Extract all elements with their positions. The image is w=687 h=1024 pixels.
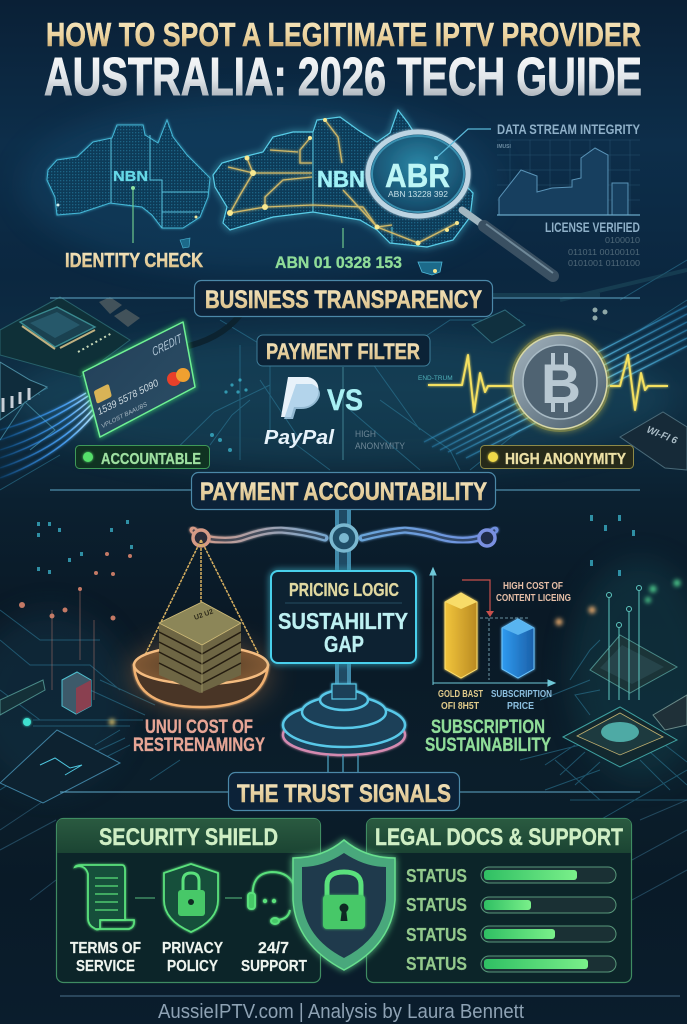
central security shield: [293, 840, 395, 970]
cost versus price bar chart: HIGH COST OF: [503, 580, 563, 592]
label: identity check: IDENTITY CHECK: [65, 250, 203, 272]
panel: security shield: SECURITY SHIELD: [99, 824, 278, 851]
label: unit cost of restreaming: RESTRENAMINGY: [133, 735, 265, 756]
status row 4: [406, 954, 616, 974]
cost versus price bar chart: CONTENT LICEING: [496, 592, 571, 604]
map: identity check: [47, 120, 210, 272]
payment filter heading: PAYMENT FILTER: [266, 339, 420, 364]
magnifying glass: ABR lookup: ABN 13228 392: [388, 189, 448, 199]
footer attribution: AussieIPTV.com | Analysis by Laura Bennett: [158, 1001, 524, 1023]
status row 4: STATUS: [406, 954, 467, 974]
label: subscription sustainability: [425, 717, 551, 756]
data stream integrity chart: IMUSI: [497, 144, 512, 150]
pill: accountable: ACCOUNTABLE: [101, 451, 201, 468]
board chips: pricing section: [0, 586, 687, 803]
cost versus price bar chart: [430, 568, 571, 712]
map: NBN network: [213, 110, 473, 275]
license verified: 0101001 0110100: [568, 258, 640, 268]
balance scale: [193, 510, 495, 772]
pill: accountable: [76, 446, 210, 468]
label: subscription sustainability: SUBSCRIPTION: [431, 717, 545, 738]
label: terms of service: TERMS OF: [70, 940, 141, 957]
label: privacy policy: PRIVACY: [162, 940, 223, 957]
payment filter heading: [257, 335, 430, 366]
magnifying glass: ABR lookup: [368, 132, 553, 276]
banner: business transparency: BUSINESS TRANSPARENCY: [205, 286, 482, 314]
data stream integrity chart: [434, 121, 641, 215]
status row 3: STATUS: [406, 925, 467, 945]
label: unit cost of restreaming: [133, 717, 265, 756]
board chips: payment section: WI-FI 6: [645, 425, 679, 447]
label: subscription sustainability: SUSTAINABILITY: [425, 735, 551, 756]
pan with gold stack: U2 U2: [193, 608, 214, 622]
map: identity check: NBN: [113, 168, 148, 185]
heartbeat line and bitcoin coin: [428, 332, 668, 432]
PayPal vs comparison: HIGH: [355, 429, 376, 440]
data stream integrity chart: DATA STREAM INTEGRITY: [497, 121, 641, 137]
license verified: LICENSE VERIFIED: [545, 219, 640, 235]
PayPal vs comparison: ANONYMITY: [355, 441, 406, 452]
cost versus price bar chart: SUBSCRIPTION: [491, 688, 552, 700]
heartbeat line and bitcoin coin: B: [541, 352, 581, 415]
credit card: CREDIT: [151, 331, 184, 359]
map: NBN network: NBN: [317, 166, 365, 192]
cost versus price bar chart: OFI 8H5T: [441, 700, 479, 712]
license verified: 011011 00100101: [568, 247, 640, 257]
status row 3: [406, 925, 616, 945]
banner: payment accountability: PAYMENT ACCOUNTABILITY: [200, 478, 487, 506]
board chips: payment section: [0, 270, 687, 470]
cost versus price bar chart: GOLD BAST: [438, 688, 483, 700]
cable behind card: [180, 315, 240, 348]
panel: security shield: [56, 818, 320, 982]
pan with gold stack: [130, 540, 270, 709]
icon: privacy shield: [164, 864, 218, 932]
cost versus price bar chart: PRICE: [507, 700, 534, 712]
icon: headset: [248, 872, 295, 924]
credit card: [83, 322, 195, 437]
pricing logic panel: [271, 571, 416, 663]
panel: security shield: SERVICE: [76, 958, 135, 975]
banner: the trust signals: [60, 772, 640, 810]
banner: business transparency: [50, 280, 640, 316]
license verified: 0100010: [605, 235, 640, 245]
credit card: VPLOST BAAUBS: [101, 401, 148, 430]
label: 24/7 support: 24/7: [258, 940, 289, 957]
banner: the trust signals: THE TRUST SIGNALS: [237, 780, 451, 808]
pricing logic panel: PRICING LOGIC: [289, 580, 399, 600]
pricing logic panel: GAP: [324, 631, 364, 657]
label: ABN number: ABN 01 0328 153: [275, 253, 402, 272]
pricing logic panel: SUSTAHILITY: [278, 608, 408, 634]
scale base: [283, 684, 405, 755]
credit card: 1539 5578 5090: [97, 377, 160, 418]
status row 2: [406, 895, 616, 915]
PayPal vs comparison: END-TRUM: [418, 375, 453, 382]
label: unit cost of restreaming: UNUI COST OF: [145, 717, 253, 738]
data stream into card: [0, 393, 96, 478]
panel: security shield: SUPPORT: [241, 958, 307, 975]
PayPal vs comparison: PayPal: [264, 427, 334, 449]
blue data streams behind coin: [424, 306, 687, 458]
panel: legal docs and support: [366, 818, 632, 982]
PayPal vs comparison: [264, 367, 453, 460]
banner: payment accountability: [50, 472, 640, 510]
panel: legal docs and support: LEGAL DOCS & SUPPORT: [375, 824, 623, 851]
PayPal vs comparison: VS: [327, 384, 363, 417]
icon: terms scroll: [75, 865, 134, 930]
panel: security shield: POLICY: [167, 958, 218, 975]
license verified: [545, 219, 640, 268]
status row 1: [406, 866, 616, 886]
status row 1: STATUS: [406, 866, 467, 886]
pill: high anonymity: [480, 446, 634, 468]
pill: high anonymity: HIGH ANONYMITY: [505, 451, 626, 468]
status row 2: STATUS: [406, 895, 467, 915]
title: [44, 16, 642, 107]
magnifying glass: ABR lookup: ABR: [385, 157, 450, 194]
